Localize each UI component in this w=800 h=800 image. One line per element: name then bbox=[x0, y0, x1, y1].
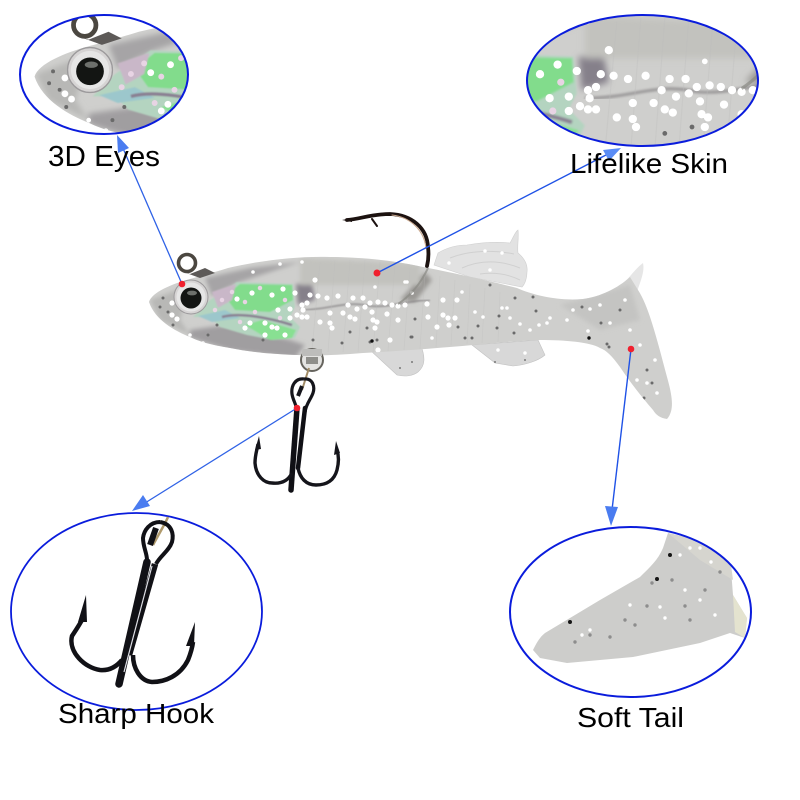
callout: 3D Eyes bbox=[19, 14, 189, 172]
enlarged treble hook bbox=[71, 517, 195, 684]
callout: Lifelike Skin bbox=[526, 14, 759, 174]
treble hook bbox=[255, 349, 340, 490]
red marker dots bbox=[179, 270, 634, 411]
arrow: Lifelike Skin bbox=[377, 148, 621, 273]
arrow: 3D Eyes bbox=[117, 135, 182, 284]
callout: Sharp Hook bbox=[11, 513, 262, 729]
callout: Lifelike Skin: Lifelike Skin bbox=[570, 148, 728, 179]
arrow: Sharp Hook bbox=[132, 408, 297, 511]
fishing lure bbox=[149, 214, 672, 419]
callout: Soft Tail bbox=[510, 527, 751, 733]
callout: 3D Eyes: 3D Eyes bbox=[48, 141, 160, 173]
arrow: Soft Tail bbox=[605, 349, 631, 526]
swivel ring bbox=[301, 349, 323, 371]
callout: Soft Tail: Soft Tail bbox=[577, 702, 684, 733]
callout: Sharp Hook: Sharp Hook bbox=[58, 698, 215, 729]
